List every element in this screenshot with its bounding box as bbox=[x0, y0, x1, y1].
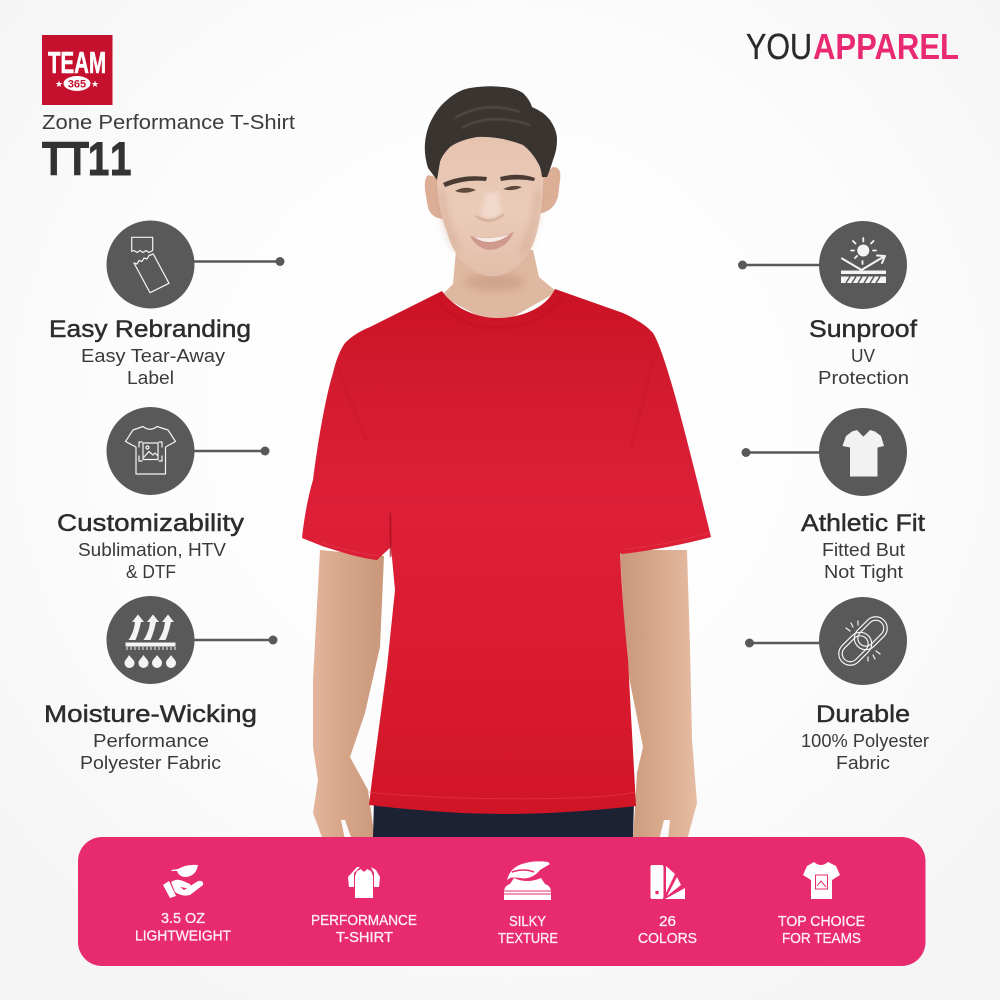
heading: Customizability bbox=[57, 510, 244, 537]
description: Sublimation, HTV bbox=[78, 540, 226, 560]
cheek shading bbox=[441, 190, 539, 255]
ears bbox=[425, 167, 560, 219]
jeans bbox=[373, 800, 634, 837]
brand wordmark: YouApparel: APPAREL bbox=[813, 26, 959, 67]
feature: Durable bbox=[745, 597, 929, 773]
brand logo: Team 365: 365 bbox=[68, 78, 86, 90]
description bbox=[81, 346, 225, 388]
right arm bbox=[620, 550, 697, 840]
description: Fitted But bbox=[822, 540, 905, 560]
description: 100% Polyester bbox=[801, 731, 929, 751]
feature: Moisture-Wicking bbox=[44, 596, 278, 773]
description: Protection bbox=[818, 368, 909, 388]
label bbox=[778, 913, 865, 947]
description: Easy Tear-Away bbox=[81, 346, 225, 366]
label: TEXTURE bbox=[498, 930, 558, 947]
description: & DTF bbox=[126, 562, 176, 582]
highlight: performance t-shirt bbox=[311, 867, 417, 946]
icon: hand holding leaf bbox=[163, 865, 203, 898]
face bbox=[437, 137, 543, 276]
icon: tear-away label bbox=[106, 220, 194, 308]
icon: sun and UV reflection bbox=[819, 221, 907, 309]
icon: fitted t-shirt bbox=[819, 408, 907, 496]
heading: Easy Rebranding bbox=[49, 316, 251, 343]
icon: printed t-shirt bbox=[803, 862, 840, 899]
feature: Athletic Fit bbox=[742, 408, 925, 582]
label: FOR TEAMS bbox=[782, 930, 861, 947]
label: 3.5 OZ bbox=[161, 910, 205, 927]
description: Polyester Fabric bbox=[80, 753, 221, 773]
shirt shading bbox=[322, 298, 709, 799]
connector line bbox=[745, 638, 825, 648]
icon: moisture wicking arrows bbox=[106, 596, 194, 684]
red t-shirt bbox=[302, 289, 711, 814]
label bbox=[311, 912, 417, 946]
brand logo: Team 365: ★ bbox=[91, 79, 99, 89]
description bbox=[78, 540, 226, 582]
brand wordmark: YouApparel bbox=[746, 26, 959, 67]
feature: Sunproof bbox=[738, 221, 917, 388]
feature: Customizability bbox=[57, 407, 270, 582]
nose bbox=[476, 192, 504, 221]
heading: Moisture-Wicking bbox=[44, 701, 257, 728]
label bbox=[498, 913, 558, 947]
label: SILKY bbox=[509, 913, 546, 930]
highlight: silky texture bbox=[498, 861, 558, 947]
highlight: 3.5 oz lightweight bbox=[135, 865, 231, 944]
mouth bbox=[470, 232, 514, 250]
bottom highlights banner bbox=[78, 837, 926, 966]
description bbox=[80, 731, 221, 773]
heading: Sunproof bbox=[809, 316, 917, 343]
description: UV bbox=[851, 346, 875, 366]
brand wordmark: YouApparel: YOU bbox=[746, 26, 812, 67]
label bbox=[135, 910, 231, 944]
model wearing red t-shirt bbox=[302, 86, 711, 840]
description: Fabric bbox=[836, 753, 890, 773]
brand logo: Team 365: TEAM bbox=[48, 45, 106, 80]
label: COLORS bbox=[638, 930, 697, 947]
connector line bbox=[190, 257, 284, 266]
product name: Zone Performance T-Shirt bbox=[42, 112, 295, 134]
connector line bbox=[742, 448, 825, 457]
brand logo: Team 365: ★ bbox=[55, 79, 63, 89]
neck bbox=[441, 250, 557, 326]
left arm bbox=[313, 550, 384, 840]
description: Performance bbox=[93, 731, 209, 751]
heading: Athletic Fit bbox=[801, 510, 925, 537]
eyebrows bbox=[443, 175, 535, 187]
description bbox=[801, 731, 929, 773]
connector line bbox=[190, 636, 278, 644]
icon: printed t-shirt bbox=[106, 407, 194, 495]
description: Label bbox=[127, 368, 174, 388]
feature: Easy Rebranding bbox=[49, 220, 284, 388]
description: Not Tight bbox=[824, 562, 903, 582]
highlight: 26 colors bbox=[638, 865, 697, 947]
eyes bbox=[455, 186, 522, 193]
icon: colour swatches bbox=[650, 865, 685, 899]
hair bbox=[425, 86, 557, 180]
label bbox=[638, 913, 697, 947]
product code: TT11 bbox=[42, 133, 131, 186]
label: 26 bbox=[659, 913, 676, 930]
description bbox=[822, 540, 905, 582]
chin shadow bbox=[465, 273, 525, 291]
connector line bbox=[190, 446, 270, 456]
icon: chain link bbox=[819, 597, 907, 685]
icon: mattress with silk bbox=[504, 861, 551, 900]
label: TOP CHOICE bbox=[778, 913, 865, 930]
label: PERFORMANCE bbox=[311, 912, 417, 929]
highlight: top choice for teams bbox=[778, 862, 865, 947]
label: T-SHIRT bbox=[336, 929, 393, 946]
label: LIGHTWEIGHT bbox=[135, 928, 231, 944]
brand logo: Team 365 bbox=[42, 35, 112, 105]
connector line bbox=[738, 260, 825, 270]
description bbox=[818, 346, 909, 388]
heading: Durable bbox=[816, 701, 910, 728]
icon: raglan t-shirt bbox=[348, 867, 380, 898]
